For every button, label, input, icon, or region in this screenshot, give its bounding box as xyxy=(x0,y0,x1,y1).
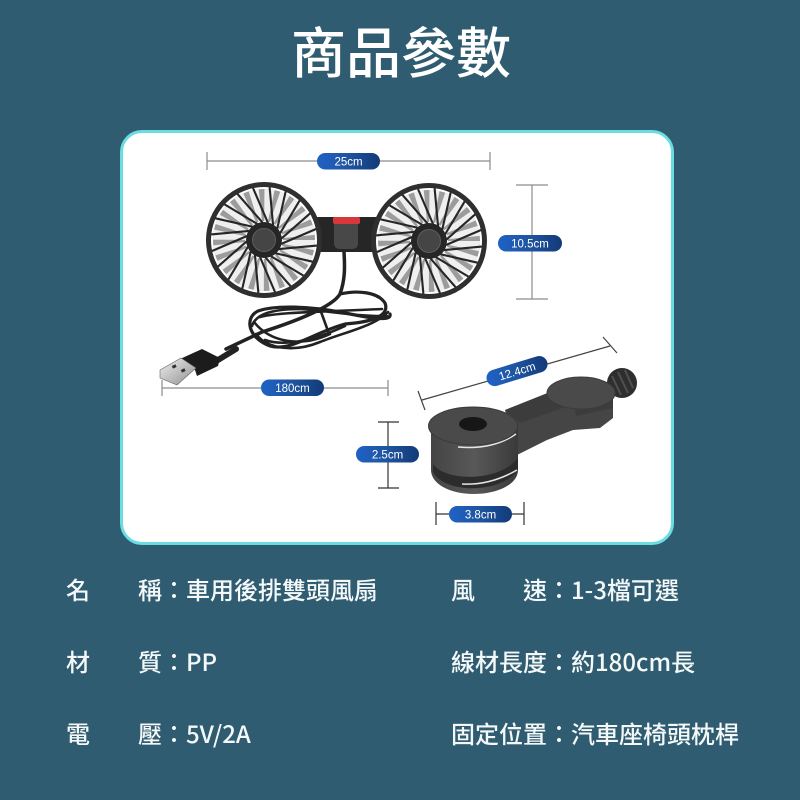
spec: material value: ：PP xyxy=(162,643,217,678)
arm xyxy=(505,388,613,455)
spec: name label xyxy=(66,571,162,606)
icon: USB plug xyxy=(160,349,236,385)
spec: power label xyxy=(66,715,162,750)
title: 商品參數 xyxy=(291,9,511,89)
right fan xyxy=(374,186,484,296)
spec: mounting: 固定位置：汽車座椅頭枕桿 xyxy=(451,715,739,750)
icon: dual head fan xyxy=(208,184,484,296)
dimension: 10.5cm height xyxy=(498,185,562,299)
spec: wind speed label xyxy=(451,571,547,606)
spec: cable length: 線材長度：約180cm長 xyxy=(451,643,695,678)
cylinder head xyxy=(431,427,518,494)
spec: name label: 稱 xyxy=(138,571,162,606)
spec: wind speed value: ：1-3檔可選 xyxy=(547,571,679,606)
spec: material label: 材 xyxy=(66,643,90,678)
icon: headrest hook bracket xyxy=(428,368,637,494)
left fan xyxy=(208,184,320,296)
dimension: 12.4cm length: 12.4cm xyxy=(498,361,537,383)
spec: wind speed label: 風 xyxy=(451,571,475,606)
spec: material label: 質 xyxy=(138,643,162,678)
spec: name label: 名 xyxy=(66,571,90,606)
spec: power value: ：5V/2A xyxy=(162,715,251,750)
dimension: 25cm width xyxy=(207,152,490,170)
fan bridge and switch xyxy=(315,217,385,252)
dimension: 12.4cm length xyxy=(418,337,617,410)
dimension: 25cm width: 25cm xyxy=(334,156,363,168)
spec: name value: ：車用後排雙頭風扇 xyxy=(162,571,378,606)
spec: material label xyxy=(66,643,162,678)
dimension: 180cm cable xyxy=(162,380,388,396)
dimension: 2.5cm height xyxy=(356,422,419,488)
swivel ball xyxy=(603,368,637,399)
dimension: 10.5cm height: 10.5cm xyxy=(511,238,549,250)
dimension: 180cm cable: 180cm xyxy=(275,383,310,395)
spec: power label: 電 xyxy=(66,715,90,750)
spec: wind speed label: 速 xyxy=(523,571,547,606)
icon: USB cable coil xyxy=(226,252,390,349)
dimension: 2.5cm height: 2.5cm xyxy=(372,449,403,461)
panel: product image xyxy=(120,130,674,545)
dimension: 3.8cm width xyxy=(436,502,524,525)
spec: power label: 壓 xyxy=(138,715,162,750)
dimension: 3.8cm width: 3.8cm xyxy=(465,509,496,521)
